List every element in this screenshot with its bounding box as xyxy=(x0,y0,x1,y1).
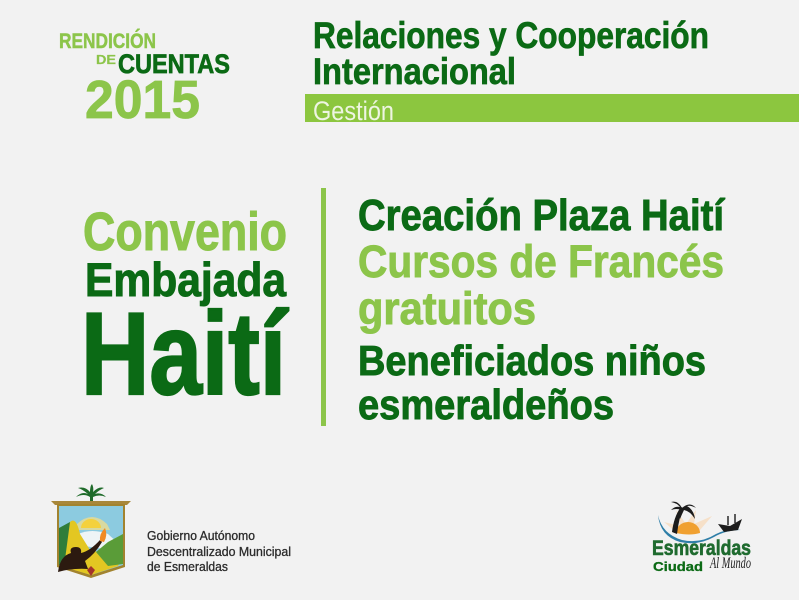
text block: Gobierno Autónomo Descentralizado Municipal de Esmeraldas: de Esmeraldas xyxy=(147,559,228,574)
text block: project details: Cursos de Francés xyxy=(358,236,724,287)
logo: Rendición de Cuentas 2015: CUENTAS xyxy=(118,49,230,79)
logo: Esmeraldas Ciudad Al Mundo: Esmeraldas xyxy=(652,537,751,560)
logo: Rendición de Cuentas 2015 xyxy=(59,29,230,130)
headline: Convenio Embajada Haití: Embajada xyxy=(85,253,287,306)
text block: project details: Beneficiados niños xyxy=(358,337,706,384)
heading: Relaciones y Cooperación Internacional: Internacional xyxy=(313,51,516,92)
section bar: Gestión: Gestión xyxy=(313,96,394,126)
logo: Esmeraldas Ciudad Al Mundo xyxy=(652,502,751,574)
headline: Convenio Embajada Haití: Haití xyxy=(81,288,289,419)
logo: Esmeraldas Ciudad Al Mundo: Ciudad xyxy=(653,559,703,574)
logo: Rendición de Cuentas 2015: DE xyxy=(96,52,116,67)
text block: project details: gratuitos xyxy=(358,283,536,334)
text block: project details xyxy=(358,191,726,428)
text block: project details: Creación Plaza Haití xyxy=(358,191,726,240)
text block: project details: esmeraldeños xyxy=(358,381,614,428)
headline: Convenio Embajada Haití: Convenio xyxy=(83,202,287,262)
text block: Gobierno Autónomo Descentralizado Municipal de Esmeraldas xyxy=(147,528,291,574)
section bar: Gestión xyxy=(305,94,799,126)
headline: Convenio Embajada Haití xyxy=(81,202,289,419)
logo: Rendición de Cuentas 2015: RENDICIÓN xyxy=(59,29,156,53)
text block: Gobierno Autónomo Descentralizado Municipal de Esmeraldas: Descentralizado Municipal xyxy=(147,544,291,559)
heading: Relaciones y Cooperación Internacional: Relaciones y Cooperación xyxy=(313,15,709,56)
logo: Esmeraldas Ciudad Al Mundo: Al Mundo xyxy=(709,555,751,572)
heading: Relaciones y Cooperación Internacional xyxy=(313,15,709,92)
text block: Gobierno Autónomo Descentralizado Municipal de Esmeraldas: Gobierno Autónomo xyxy=(147,528,255,543)
logo: Rendición de Cuentas 2015: 2015 xyxy=(85,70,200,130)
icon: Esmeraldas coat of arms xyxy=(51,484,131,578)
